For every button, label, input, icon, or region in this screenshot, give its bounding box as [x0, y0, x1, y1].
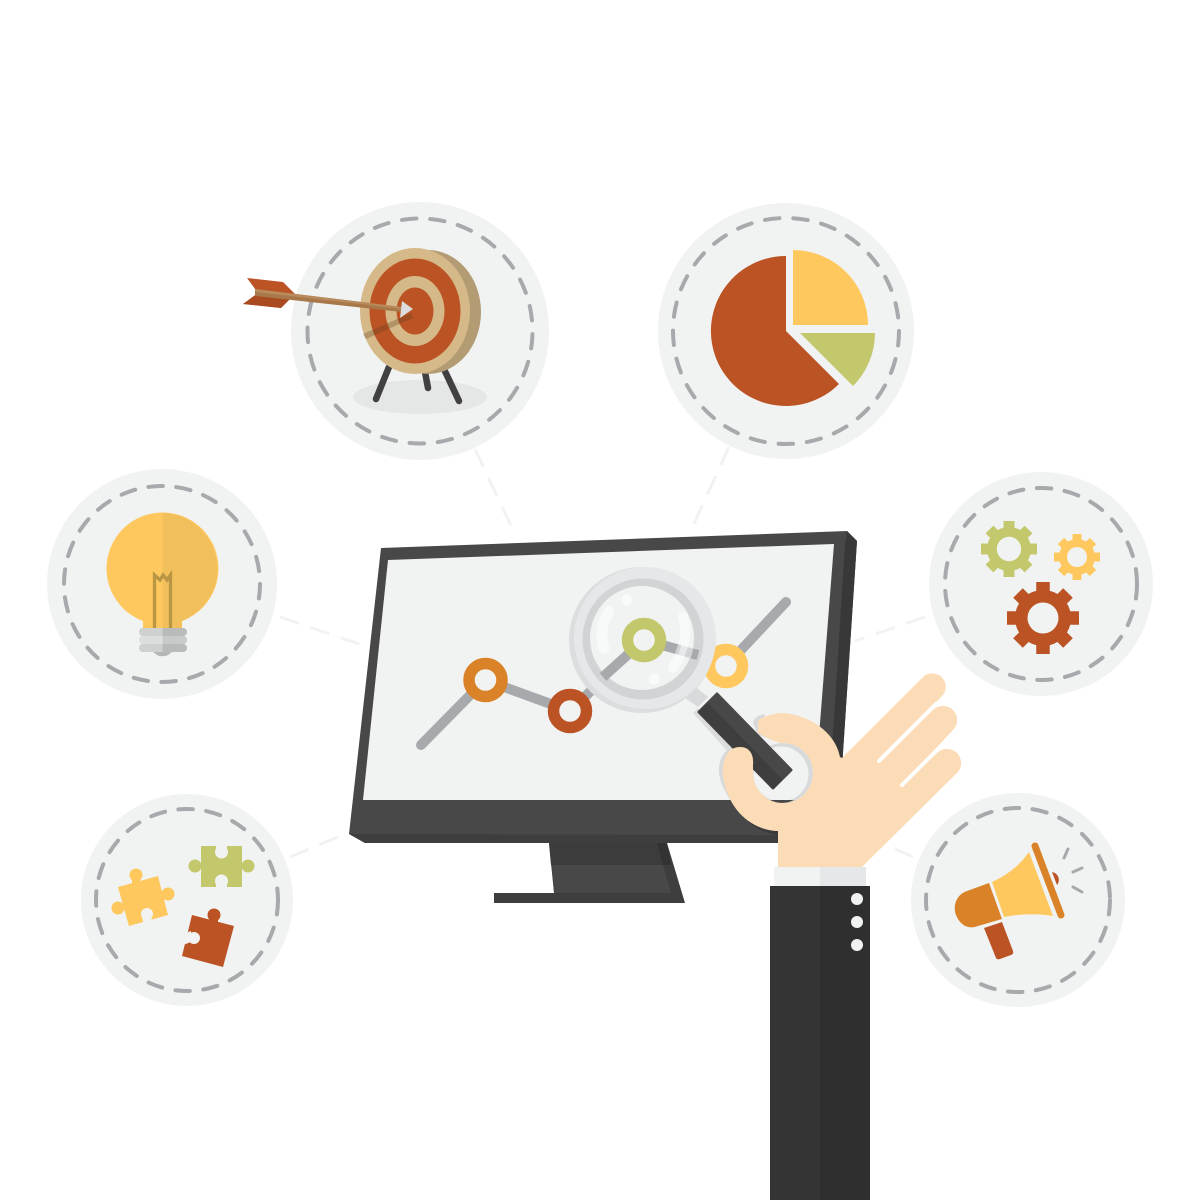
- bulb base: [139, 628, 187, 656]
- cuff: [774, 867, 866, 886]
- megaphone rim: [1035, 846, 1061, 915]
- monitor: [349, 531, 857, 903]
- lens frame: [569, 567, 715, 713]
- lens chart segment: [603, 640, 680, 677]
- filament: [154, 575, 170, 628]
- magnifier grip: [698, 694, 791, 789]
- line chart: [421, 602, 786, 745]
- chart point red: [554, 694, 586, 728]
- sleeve buttons: [851, 893, 863, 951]
- puzzle piece: yellow: [112, 868, 174, 927]
- target legs: [376, 367, 459, 401]
- monitor chin shade: [349, 834, 778, 843]
- arrow: [243, 278, 413, 318]
- lens highlights: [602, 612, 685, 668]
- grip shadow: [693, 708, 736, 753]
- thumb shadow: [719, 747, 745, 800]
- panel: megaphone: [911, 793, 1125, 1007]
- ring interior: [753, 743, 813, 803]
- monitor side shade: [826, 531, 857, 843]
- megaphone back: [955, 883, 1002, 927]
- target board: [360, 248, 481, 374]
- magnifying glass back: [569, 567, 736, 753]
- target shadow: [353, 380, 487, 414]
- pie slice: large: [711, 256, 839, 406]
- puzzle piece: green: [188, 844, 254, 889]
- chart point orange: [469, 664, 502, 696]
- panel: pie chart: [658, 203, 914, 459]
- chart point yellow: [710, 650, 742, 682]
- monitor frame: [349, 531, 857, 843]
- gear: yellow: [1054, 534, 1100, 580]
- megaphone tip: [1052, 872, 1059, 885]
- hand shape: [723, 673, 961, 867]
- panel: gears: [929, 472, 1153, 696]
- sound lines: [1064, 849, 1082, 892]
- handle neck: [685, 688, 708, 707]
- puzzle piece: red: [182, 908, 234, 967]
- sleeve: [770, 886, 870, 1200]
- thumb: [723, 747, 778, 831]
- hand: [698, 673, 961, 1200]
- pie slice: green: [800, 333, 875, 386]
- finger shadow: [753, 714, 775, 740]
- gear: green: [981, 521, 1037, 577]
- megaphone horn: [992, 852, 1053, 917]
- monitor stand: [494, 843, 685, 903]
- megaphone handle: [984, 922, 1013, 959]
- connector lines: [280, 447, 925, 857]
- panel: target: [243, 202, 549, 460]
- gear: red: [1007, 582, 1079, 654]
- finger gaps: [879, 704, 945, 785]
- monitor screen: [363, 544, 834, 800]
- panel: light bulb: [47, 469, 277, 699]
- pie slice: yellow: [793, 250, 868, 325]
- bulb glass: [106, 513, 219, 630]
- panel: puzzle: [81, 794, 293, 1006]
- lens green point: [628, 624, 660, 656]
